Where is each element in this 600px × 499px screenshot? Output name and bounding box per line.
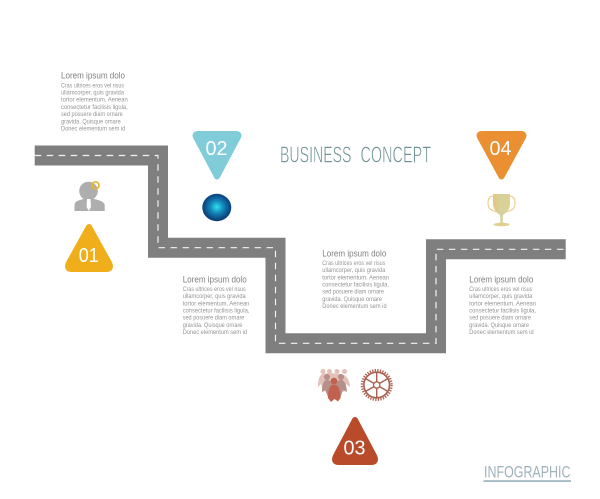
text block: top left: consectetur facilisis ligula, — [61, 104, 128, 111]
text block: fourth: sed posuere diam ornare — [469, 315, 531, 322]
text block: top left: ullamcorper, quis gravida — [61, 89, 124, 96]
text block: top left: sed posuere diam ornare — [61, 111, 123, 118]
icon: trophy — [488, 194, 515, 226]
text block: fourth: Lorem ipsum dolo — [469, 274, 533, 284]
text block: top left: Donec elementum sem id — [61, 125, 126, 132]
text block: third: Cras ultrices eros vel risus — [322, 260, 386, 267]
text block: fourth: consectetur facilisis ligula, — [469, 307, 536, 314]
text block: second: Donec elementum sem id — [183, 329, 247, 336]
text block: top left: gravida. Quisque ornare — [61, 118, 121, 125]
text block: third: Donec elementum sem id — [322, 303, 387, 310]
winding road — [35, 156, 566, 343]
marker 03 — [335, 420, 375, 462]
text block: second — [183, 274, 250, 336]
marker 02 — [196, 134, 238, 176]
text block: second: gravida. Quisque ornare — [183, 322, 243, 329]
text block: fourth: gravida. Quisque ornare — [469, 322, 529, 329]
marker 01: 01 — [79, 245, 99, 267]
text block: second: ullamcorper, quis gravida — [183, 293, 246, 300]
icon: gear — [362, 370, 392, 400]
text block: top left: tortor elementum. Aenean — [61, 97, 128, 104]
text block: top left: Lorem ipsum dolo — [61, 71, 125, 81]
text block: top left: Cras ultrices eros vel risus — [61, 82, 125, 89]
footer label: INFOGRAPHIC: INFOGRAPHIC — [484, 462, 570, 482]
text block: fourth: tortor elementum. Aenean — [469, 300, 536, 307]
text block: fourth: ullamcorper, quis gravida — [469, 293, 533, 300]
text block: second: tortor elementum. Aenean — [183, 300, 250, 307]
text block: third: sed posuere diam ornare — [322, 289, 384, 296]
marker 03: 03 — [344, 438, 366, 460]
icon: businessman with gear — [74, 182, 105, 211]
text block: second: Lorem ipsum dolo — [183, 274, 247, 284]
text block: second: sed posuere diam ornare — [183, 315, 245, 322]
text block: third: Lorem ipsum dolo — [322, 248, 386, 258]
text block: fourth — [469, 274, 536, 336]
marker 04 — [480, 134, 523, 176]
icon: group of people — [318, 369, 350, 402]
marker 04: 04 — [490, 138, 512, 160]
text block: second: consectetur facilisis ligula, — [183, 307, 250, 314]
title: CONCEPT — [360, 141, 431, 167]
text block: second: Cras ultrices eros vel risus — [183, 286, 246, 293]
text block: top left — [61, 71, 128, 132]
text block: fourth: Cras ultrices eros vel risus — [469, 286, 533, 293]
marker 02: 02 — [206, 138, 228, 160]
text block: third — [322, 248, 389, 310]
text block: third: ullamcorper, quis gravida — [322, 267, 386, 274]
text block: third: tortor elementum. Aenean — [322, 274, 389, 281]
text block: third: consectetur facilisis ligula, — [322, 282, 389, 289]
marker 01 — [68, 227, 110, 269]
title: BUSINESS — [280, 141, 352, 167]
icon: blue sphere — [202, 194, 231, 221]
text block: fourth: Donec elementum sem id — [469, 329, 534, 336]
text block: third: gravida. Quisque ornare — [322, 296, 382, 303]
